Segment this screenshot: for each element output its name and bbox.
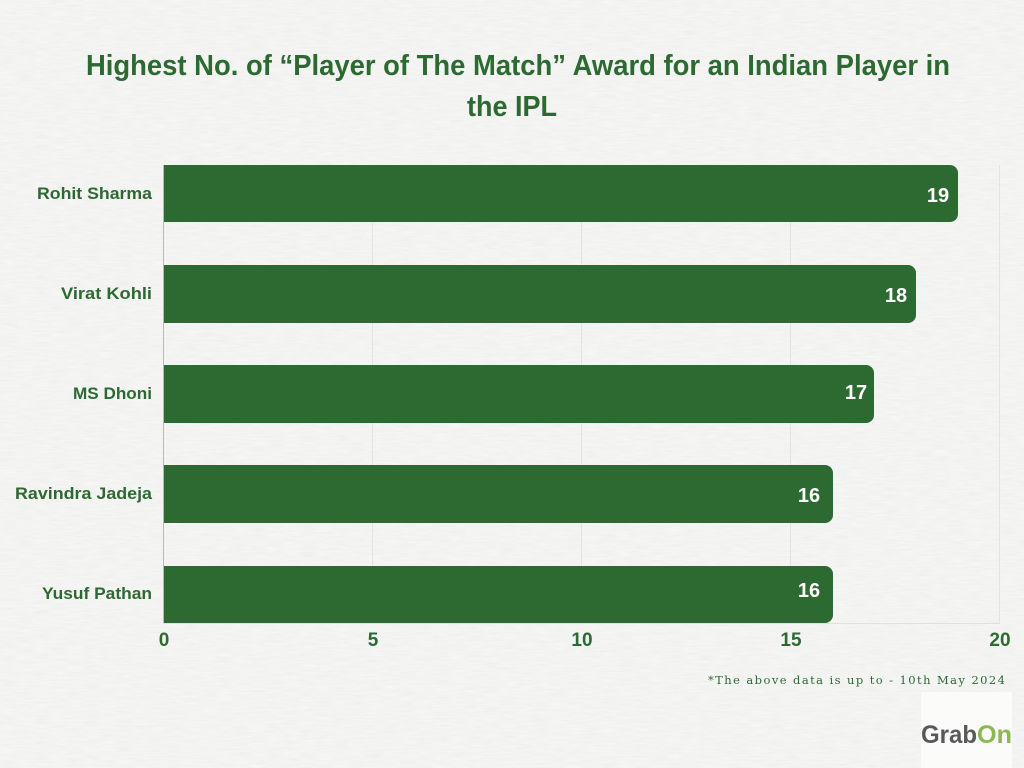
bar: Virat Kohli: 18 bbox=[885, 285, 907, 307]
title: the IPL bbox=[467, 91, 557, 123]
x axis labels: 5 bbox=[368, 630, 379, 651]
x axis labels: 0 bbox=[159, 630, 169, 651]
bar: MS Dhoni: MS Dhoni bbox=[73, 384, 152, 403]
bar: Rohit Sharma: Rohit Sharma bbox=[37, 184, 153, 203]
title bbox=[86, 50, 950, 123]
bar: Ravindra Jadeja: Ravindra Jadeja bbox=[15, 484, 153, 503]
bar: Yusuf Pathan: Yusuf Pathan bbox=[42, 584, 152, 603]
bar: Ravindra Jadeja: 16 bbox=[798, 485, 820, 507]
bar: MS Dhoni bbox=[73, 365, 874, 423]
title: Highest No. of “Player of The Match” Award for an Indian Player in bbox=[86, 50, 950, 82]
footnote: *The above data is up to - 10th May 2024 bbox=[708, 673, 1005, 687]
logo: GrabOn: On bbox=[977, 721, 1012, 749]
x axis labels: 15 bbox=[780, 630, 802, 651]
bar: Virat Kohli bbox=[61, 265, 916, 323]
logo: GrabOn bbox=[921, 692, 1012, 768]
logo: GrabOn: Grab bbox=[921, 721, 977, 749]
bar: Rohit Sharma: 19 bbox=[927, 185, 949, 207]
bar chart bbox=[15, 165, 958, 623]
x axis labels: 10 bbox=[571, 630, 593, 651]
bar: Virat Kohli: Virat Kohli bbox=[61, 284, 152, 303]
x axis labels: 20 bbox=[989, 630, 1011, 651]
bar: Yusuf Pathan bbox=[42, 566, 833, 623]
bar: Ravindra Jadeja bbox=[15, 465, 833, 523]
bar: Yusuf Pathan: 16 bbox=[798, 580, 820, 602]
bar: MS Dhoni: 17 bbox=[845, 382, 867, 404]
bar: Rohit Sharma bbox=[37, 165, 958, 222]
x axis labels bbox=[159, 630, 1011, 651]
